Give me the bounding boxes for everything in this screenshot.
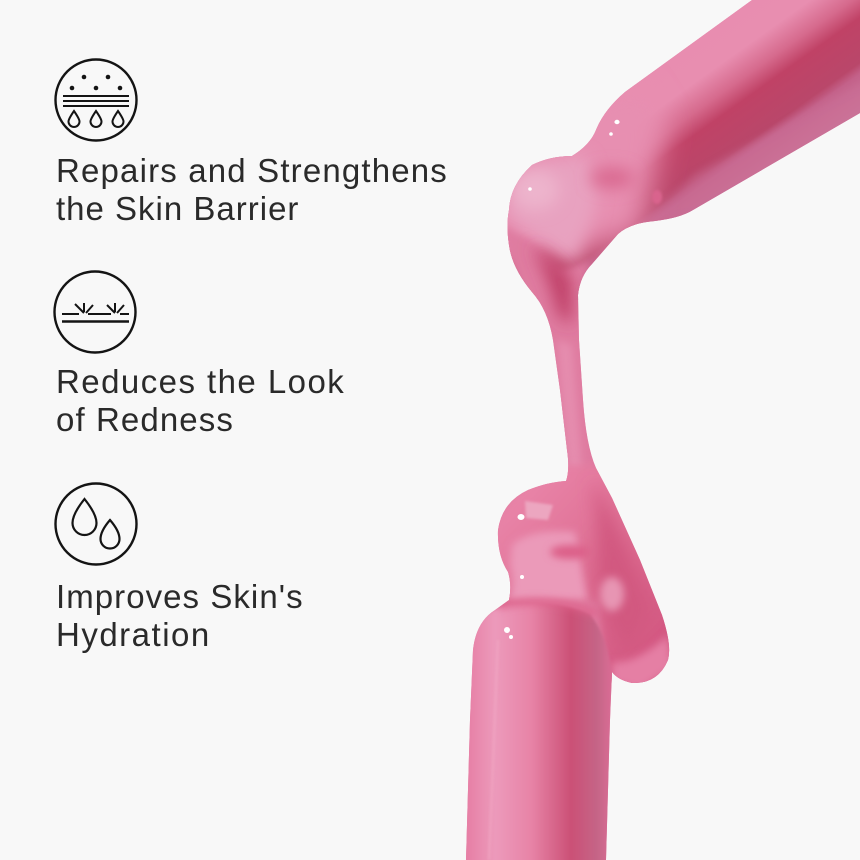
heading: improves hydration: Improves Skin's [56, 578, 304, 615]
bulb at nozzle [506, 155, 596, 262]
upper pipette body [500, 0, 860, 300]
heading: repairs and strengthens: the Skin Barrier [56, 190, 299, 227]
icon: hydration drops [54, 482, 138, 566]
heading: repairs and strengthens [56, 152, 448, 227]
nozzle crease [590, 168, 634, 188]
icon: skin barrier with dots, layers and drops [54, 58, 138, 142]
blob right lobe [592, 494, 639, 620]
specular highlights [504, 120, 620, 639]
lobe lower rim [611, 636, 670, 683]
lower blob [498, 464, 670, 688]
icon: reduced redness [53, 270, 137, 354]
pale reflective band [657, 113, 860, 217]
blob body light folds [508, 531, 588, 602]
bulb highlight [511, 170, 559, 210]
heading: repairs and strengthens: Repairs and Strengthens [56, 152, 448, 189]
lower pipette body [458, 603, 612, 860]
nozzle dimple [652, 190, 662, 204]
lobe highlight [600, 577, 624, 611]
heading: reduces redness [56, 363, 345, 438]
heading: improves hydration [56, 578, 304, 653]
strand midsection [557, 340, 582, 470]
nozzle pale wash [508, 102, 677, 265]
strand dark core [532, 245, 572, 325]
heading: reduces redness: Reduces the Look [56, 363, 345, 400]
lower pipette rim shadow [498, 602, 596, 614]
heading: improves hydration: Hydration [56, 616, 211, 653]
blob translucent lip [525, 501, 553, 520]
strand light [500, 225, 590, 480]
lower pipette edge highlight [489, 640, 498, 860]
product photo: pink serum strand [466, 0, 860, 860]
blob crease [550, 545, 590, 559]
heading: reduces redness: of Redness [56, 401, 234, 438]
